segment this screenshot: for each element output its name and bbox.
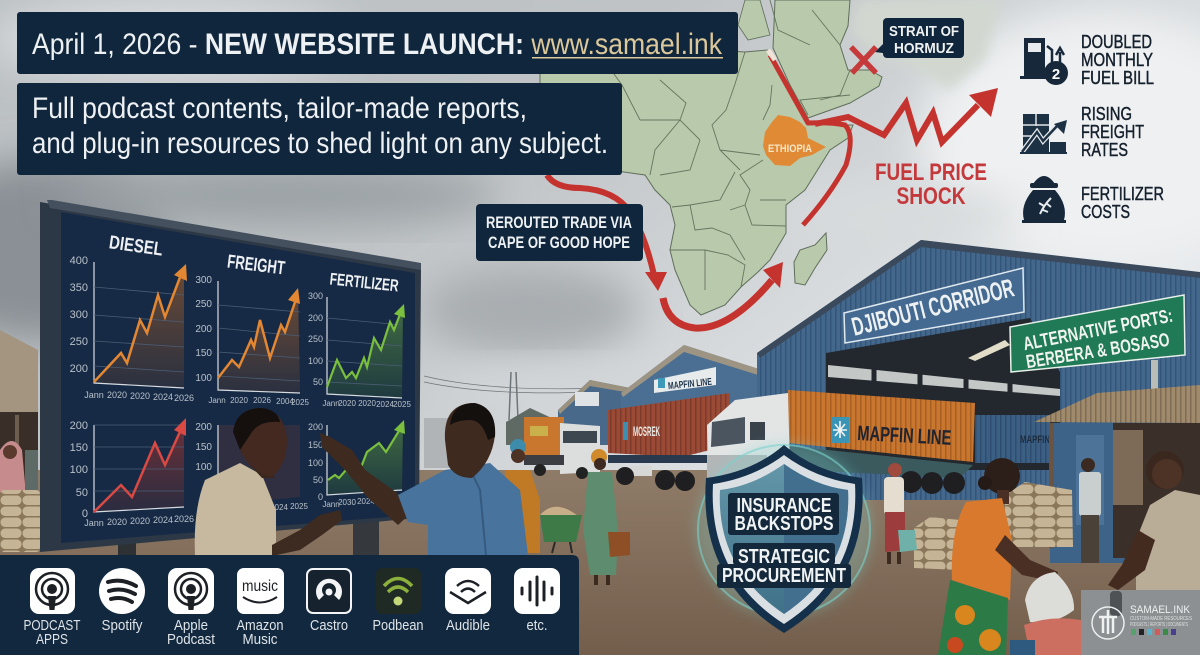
sign: Djibouti corridor: DJIBOUTI CORRIDOR: [849, 272, 1017, 342]
icon: etc waveform: etc.: [526, 617, 548, 634]
icon: podcast apps: APPS: [36, 631, 68, 648]
chart: freight lower: 2025: [290, 502, 308, 511]
chart: fertilizer lower: 200: [308, 422, 323, 432]
text: rising freight rates: FREIGHT: [1081, 122, 1144, 142]
sacks: stacks by the stall: [914, 482, 1073, 570]
chart: diesel: 400: [70, 255, 88, 267]
chart: freight: 2025: [291, 398, 309, 407]
icon: podcast apps: [24, 568, 80, 648]
icon: Amazon Music: [236, 568, 284, 648]
text: rising freight rates: RISING: [1081, 104, 1132, 124]
sign: mapfin line: [654, 367, 716, 393]
chart: fertilizer: 2020: [338, 399, 356, 408]
icon: red X at strait: [851, 47, 876, 73]
chart: fertilizer: FERTILIZER: [329, 269, 399, 296]
person: woman with red skirt: [884, 463, 917, 564]
person: man in beige shirt pointing at board: [195, 408, 342, 556]
chart: freight: 300: [195, 275, 212, 286]
icon: Amazon Music: music: [242, 578, 278, 595]
chart: fertilizer: 250: [308, 334, 323, 344]
callout: strait of hormuz: [875, 18, 964, 58]
panel: podcast platforms: [0, 555, 579, 655]
chart: fertilizer: 2025: [393, 400, 411, 409]
callout: rerouted trade: [476, 204, 643, 261]
person: man in beige shirt on the right: [1108, 451, 1200, 590]
chart: freight: 250: [195, 299, 212, 310]
warehouse opening: [826, 318, 1060, 470]
sign: mapfin line: MAPFIN LINE: [668, 377, 713, 392]
shield text: strategic procurement: PROCUREMENT: [722, 565, 846, 587]
background: dirt ground: [0, 470, 1200, 655]
text: doubled monthly fuel bill: MONTHLY: [1081, 50, 1153, 70]
chart: diesel lower: 150: [70, 442, 88, 454]
chart: fertilizer lower: 150: [308, 440, 323, 450]
map of Africa and Arabia: [540, 0, 1000, 315]
chart: diesel lower: 100: [70, 464, 88, 476]
chart: diesel lower: 2020: [130, 516, 150, 526]
chart: diesel: 2026: [174, 393, 194, 403]
chart: fertilizer: 2024: [376, 400, 394, 409]
person: woman in orange shirt: [938, 458, 1081, 655]
shield text: insurance backstops: INSURANCE: [736, 495, 832, 517]
chart: fertilizer lower: 100: [308, 458, 323, 468]
text box: podcast contents: and plug-in resources to shed light on any subject.: [32, 127, 608, 160]
watermark logo: samael.ink: CUSTOM-MADE RESOURCES: [1130, 616, 1193, 622]
icon: Amazon Music: Amazon: [236, 617, 284, 634]
icon: Apple Podcast: [167, 568, 216, 648]
truck: red container: MOSREK: [633, 423, 660, 439]
chart: diesel: 2024: [153, 392, 173, 402]
map: Ethiopia highlighted: ETHIOPIA: [768, 143, 812, 155]
banner: launch date and URL: [17, 12, 738, 74]
chart: fertilizer lower: 2024: [357, 497, 375, 506]
banner: launch date and URL: April 1, 2026 - NEW WEBSITE LAUNCH: www.samael.ink: [32, 28, 723, 61]
chart: diesel: 250: [70, 336, 88, 348]
icon: Podbean: [372, 568, 424, 634]
person: woman in orange dress: [505, 439, 540, 553]
background: cloudy sky: [0, 0, 1200, 480]
wheelbarrow with sacks: [540, 507, 582, 553]
container: blue behind: MAPFIN: [1020, 434, 1050, 446]
chart: freight lower: 200: [195, 422, 212, 433]
heading: fuel price shock: [875, 159, 987, 210]
icon: fuel pump with doubled badge: 2: [1052, 66, 1060, 83]
truck: red container: [608, 393, 730, 491]
icon: etc waveform: [514, 568, 560, 634]
heading: fuel price shock: SHOCK: [896, 183, 966, 210]
chart: fertilizer: [308, 269, 411, 409]
text: rising freight rates: [1081, 104, 1144, 160]
callout: strait of hormuz: HORMUZ: [894, 40, 954, 57]
chart: fertilizer: 50: [313, 377, 323, 387]
heading: fuel price shock: FUEL PRICE: [875, 159, 987, 186]
chart: diesel: 300: [70, 309, 88, 321]
sacks: left of billboard: [0, 490, 40, 552]
callout: rerouted trade: CAPE OF GOOD HOPE: [488, 233, 630, 252]
text: fertilizer costs: [1081, 184, 1164, 222]
chart: diesel: 2020: [107, 390, 127, 400]
watermark logo: samael.ink: SAMAEL.INK: [1130, 604, 1191, 616]
chart: freight: Jann: [208, 396, 226, 405]
billboard with charts: [40, 200, 421, 560]
person: woman in green dress with basket: [583, 449, 630, 585]
icon: Castro: [307, 569, 351, 634]
watermark logo: samael.ink: [1081, 590, 1200, 655]
sign: alternative ports: [1010, 295, 1185, 390]
chart: freight lower: 2024: [270, 503, 288, 512]
icon: Amazon Music: Music: [242, 631, 278, 648]
chart: freight: FREIGHT: [226, 252, 286, 279]
chart: diesel lower: 2026: [174, 514, 194, 524]
chart: fertilizer lower: 0: [318, 492, 323, 502]
chart: freight lower: 100: [195, 462, 212, 473]
chart: freight: 200: [195, 324, 212, 335]
callout: strait of hormuz: STRAIT OF: [889, 23, 959, 40]
shield text: insurance backstops: BACKSTOPS: [734, 513, 834, 535]
text: doubled monthly fuel bill: FUEL BILL: [1081, 68, 1154, 88]
chart: diesel lower: 200: [70, 420, 88, 432]
building: far warehouse: [558, 380, 630, 445]
shield: insurance and procurement: [695, 442, 873, 633]
icon: Audible: Audible: [446, 617, 490, 634]
chart: freight: 2026: [253, 396, 271, 405]
truck: small orange container, far: [524, 417, 600, 479]
sign: Djibouti corridor: [844, 268, 1024, 343]
chart: fertilizer lower: 50: [313, 475, 323, 485]
chart: diesel: DIESEL: [108, 232, 164, 261]
truck: orange Mapfin Line container: [707, 390, 975, 494]
chart: fertilizer: 2020: [358, 399, 376, 408]
icon: Podbean: Podbean: [372, 617, 424, 634]
person: man near stall: [1079, 458, 1101, 563]
red reroute arrow towards the Cape: [547, 175, 667, 291]
chart: diesel lower: 2020: [107, 517, 127, 527]
chart: fertilizer: 300: [308, 291, 323, 301]
map: Ethiopia highlighted: [763, 115, 826, 166]
chart: fertilizer: 100: [308, 356, 323, 366]
icon: rising freight rates: [1020, 114, 1067, 154]
chart: fertilizer lower: 2030: [338, 498, 356, 507]
chart: diesel lower: 2024: [153, 515, 173, 525]
icon: podcast apps: PODCAST: [24, 617, 80, 634]
callout: rerouted trade: REROUTED TRADE VIA: [486, 213, 632, 232]
person: man in blue shirt pointing at board: [320, 403, 528, 555]
red route: Red Sea and East Africa: [768, 50, 850, 225]
building: Djibouti corridor warehouse: [757, 240, 1200, 500]
icon: fertilizer bag: [1022, 176, 1066, 223]
chart: diesel lower: 50: [76, 487, 88, 499]
icon: Audible: [445, 568, 491, 634]
chart: fertilizer: Jann: [322, 399, 340, 408]
text: doubled monthly fuel bill: DOUBLED: [1081, 32, 1152, 52]
chart: freight lower: [195, 422, 308, 512]
text box: podcast contents: Full podcast contents, tailor-made reports,: [32, 92, 527, 125]
building: market stall hut: [1034, 385, 1200, 563]
truck cab: [707, 393, 790, 487]
chart: fertilizer: 200: [308, 313, 323, 323]
chart: diesel: 200: [70, 363, 88, 375]
chart: freight: [195, 252, 309, 407]
icon: Apple Podcast: Podcast: [167, 631, 216, 648]
chart: freight: 150: [195, 348, 212, 359]
chart: fertilizer lower: Jann: [322, 500, 340, 509]
left market building: [0, 330, 38, 495]
truck: orange Mapfin Line container: MAPFIN LINE: [857, 422, 952, 450]
chart: diesel: [70, 232, 194, 403]
building: low houses in the distance: [424, 408, 556, 468]
fuel price shock zigzag arrow: [815, 88, 998, 142]
text: fertilizer costs: FERTILIZER: [1081, 184, 1164, 204]
power pole: [424, 372, 600, 420]
text: doubled monthly fuel bill: [1081, 32, 1154, 88]
map: country borders: [600, 0, 850, 290]
chart: diesel: 2020: [130, 391, 150, 401]
chart: diesel: Jann: [84, 390, 104, 400]
chart: freight: 2020: [230, 396, 248, 405]
chart: freight: 100: [195, 373, 212, 384]
container: blue behind: [975, 415, 1050, 463]
chart: fertilizer lower: [308, 420, 405, 509]
icon: Spotify: [99, 568, 145, 634]
shield text: strategic procurement: STRATEGIC: [738, 546, 830, 568]
icon: fuel pump with doubled badge: [1020, 38, 1068, 85]
red reroute arrow around the Cape: [663, 262, 783, 328]
chart: diesel lower: [70, 418, 194, 528]
text box: podcast contents: [17, 83, 622, 175]
shield text: insurance backstops: [728, 493, 839, 535]
icon: Apple Podcast: Apple: [174, 617, 208, 634]
chart: freight: 2004: [276, 397, 294, 406]
chart: freight lower: 150: [195, 442, 212, 453]
map: Madagascar: [794, 233, 827, 285]
chart: diesel lower: Jann: [84, 518, 104, 528]
icon: Castro: Castro: [310, 617, 348, 634]
text: rising freight rates: RATES: [1081, 140, 1128, 160]
icon: Spotify: Spotify: [102, 617, 143, 634]
shield text: strategic procurement: [717, 543, 851, 588]
chart: diesel: 350: [70, 282, 88, 294]
text: fertilizer costs: COSTS: [1081, 202, 1130, 222]
chart: diesel lower: 0: [82, 508, 88, 520]
building: mid warehouse: [621, 345, 768, 440]
